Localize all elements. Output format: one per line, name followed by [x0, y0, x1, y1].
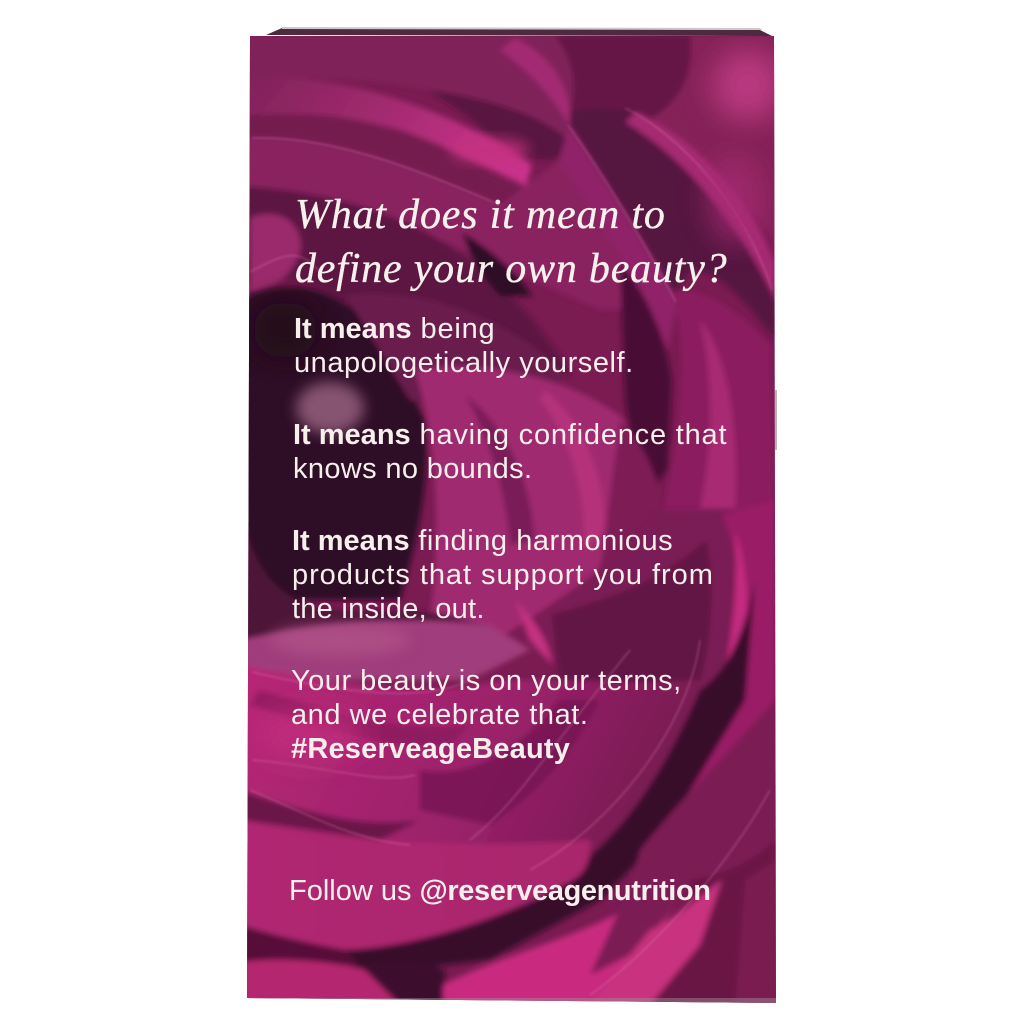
- box face: [240, 30, 785, 1010]
- paragraph: confidence: knows no bounds.: [293, 453, 532, 485]
- heading: [295, 192, 727, 292]
- heading: define your own beauty?: [295, 246, 727, 292]
- paragraph: confidence: It means having confidence that: [293, 419, 727, 451]
- paragraph: confidence: [293, 419, 727, 485]
- box top lid: [266, 28, 772, 36]
- soft colour glows: [253, 49, 784, 760]
- closing statement and hashtag: Your beauty is on your terms,: [291, 665, 682, 697]
- paragraph: harmonious products: [292, 525, 714, 625]
- paragraph: harmonious products: products that support you from: [292, 559, 714, 591]
- upper rose petals: [240, 35, 785, 520]
- paragraph: being yourself: It means being: [294, 313, 496, 345]
- box edge notch: [775, 390, 777, 450]
- lower rose petals: [240, 500, 775, 1005]
- paragraph: harmonious products: the inside, out.: [292, 593, 485, 625]
- paragraph: being yourself: unapologetically yourself.: [294, 347, 634, 379]
- closing statement and hashtag: #ReserveageBeauty: [291, 733, 570, 765]
- product box with rose photograph: [247, 27, 777, 1003]
- box bottom edge shade: [265, 998, 776, 1003]
- closing statement and hashtag: and we celebrate that.: [291, 699, 588, 731]
- petal rim highlights: [250, 108, 772, 995]
- heading: What does it mean to: [295, 192, 666, 238]
- rose heart: [240, 287, 661, 670]
- social follow line: Follow us @reserveagenutrition: [289, 875, 711, 907]
- box lid pale edge: [282, 27, 762, 30]
- paragraph: harmonious products: It means finding harmonious: [292, 525, 673, 557]
- closing statement and hashtag: [291, 665, 682, 765]
- paragraph: being yourself: [294, 313, 634, 379]
